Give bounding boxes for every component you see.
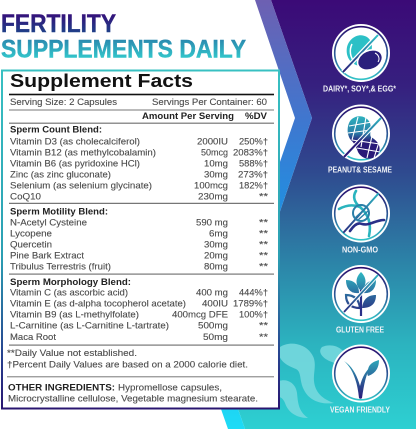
title line 2: SUPPLEMENTS DAILY [1, 36, 246, 64]
sperm morphology blend: Vitamin E (as d-alpha tocopherol acetate) [10, 299, 186, 309]
serving info: Serving Size: 2 Capsules [10, 97, 117, 107]
badge: vegan friendly [332, 344, 390, 402]
sperm count blend: 588%† [239, 159, 268, 169]
sperm motility blend: 30mg [204, 240, 228, 250]
sperm morphology blend: 50mg [203, 332, 228, 342]
sperm morphology blend: 444%† [239, 288, 268, 298]
sperm motility blend [10, 206, 268, 272]
footnotes [7, 348, 248, 370]
sperm count blend: Zinc (as zinc gluconate) [10, 170, 111, 180]
sperm motility blend: Pine Bark Extract [10, 250, 84, 260]
sperm morphology blend: 1789%† [233, 299, 268, 309]
sperm morphology blend: 400mcg DFE [172, 310, 228, 320]
badge: gluten free [332, 265, 390, 323]
sperm motility blend: Tribulus Terrestris (fruit) [10, 262, 111, 272]
sperm count blend: 50mcg [201, 148, 228, 158]
sperm count blend: 30mg [204, 170, 228, 180]
decorative sperm shapes [279, 344, 358, 418]
sperm morphology blend: 500mg [198, 321, 228, 331]
label: gluten free: GLUTEN FREE [336, 326, 385, 335]
sperm motility blend: Quercetin [10, 240, 52, 250]
title [1, 10, 246, 64]
sperm count blend: Vitamin B6 (as pyridoxine HCl) [10, 159, 140, 169]
icon: milk drop and bean [343, 35, 386, 74]
panel: supplement facts [2, 70, 279, 408]
sperm count blend: 100mcg [194, 181, 228, 191]
sperm count blend: 273%† [238, 170, 268, 180]
footnotes: **Daily Value not established. [7, 348, 137, 358]
sperm count blend: 250%† [239, 137, 268, 147]
sperm motility blend: 80mg [204, 262, 228, 272]
footnotes: †Percent Daily Values are based on a 2000 calorie diet. [7, 360, 248, 370]
sperm motility blend: Sperm Motility Blend: [10, 206, 108, 216]
icon: peanut [344, 116, 381, 159]
sperm morphology blend: L-Carnitine (as L-Carnitine L-tartrate) [10, 321, 169, 331]
sperm morphology blend: ** [259, 332, 268, 342]
sperm count blend: ** [259, 192, 268, 202]
sperm morphology blend: 400 mg [196, 288, 228, 298]
sperm count blend: 10mg [204, 159, 228, 169]
column headers: Amount Per Serving [142, 111, 234, 121]
sperm count blend [10, 125, 268, 202]
sperm motility blend: N-Acetyl Cysteine [10, 218, 87, 228]
other ingredients: OTHER INGREDIENTS: [8, 383, 115, 393]
label: non-GMO: NON-GMO [342, 246, 378, 255]
sperm morphology blend: Maca Root [10, 332, 56, 342]
sperm count blend: Sperm Count Blend: [10, 125, 102, 135]
sperm motility blend: ** [259, 240, 268, 250]
sperm count blend: 182%† [239, 181, 268, 191]
sperm morphology blend: Sperm Morphology Blend: [10, 277, 131, 287]
title line 1: FERTILITY [1, 10, 116, 38]
panel box [2, 70, 279, 408]
sperm motility blend: Lycopene [10, 228, 52, 238]
label: dairy soy egg: DAIRY*, SOY*,& EGG* [323, 85, 397, 94]
sperm count blend: 2083%† [233, 148, 268, 158]
badge: non-GMO [332, 184, 390, 242]
sperm morphology blend: Vitamin B9 (as L-methylfolate) [10, 310, 139, 320]
serving info [10, 97, 267, 107]
chevron band [208, 0, 312, 429]
sperm morphology blend: 100%† [239, 310, 268, 320]
badge: dairy soy egg free [332, 24, 390, 82]
sperm count blend: Vitamin B12 (as methylcobalamin) [10, 148, 156, 158]
other ingredients: Microcrystalline cellulose, Vegetable magnesium stearate. [8, 394, 258, 404]
sperm motility blend: ** [259, 218, 268, 228]
sperm count blend: Selenium (as selenium glycinate) [10, 181, 152, 191]
sperm motility blend: ** [259, 262, 268, 272]
badge: peanut and sesame free [332, 104, 390, 162]
sperm count blend: CoQ10 [10, 192, 41, 202]
sperm motility blend: 590 mg [196, 218, 228, 228]
sperm morphology blend: ** [259, 321, 268, 331]
sperm motility blend: 20mg [204, 250, 228, 260]
serving info: Servings Per Container: 60 [152, 97, 267, 107]
sperm count blend: Vitamin D3 (as cholecalciferol) [10, 137, 140, 147]
other ingredients: Hypromellose capsules, [118, 383, 222, 393]
sperm motility blend: ** [259, 228, 268, 238]
sperm motility blend: 6mg [209, 228, 228, 238]
sperm morphology blend [10, 277, 268, 342]
column headers: %DV [245, 111, 268, 121]
label: peanut and sesame: PEANUT& SESAME [328, 166, 393, 175]
other ingredients [8, 383, 258, 404]
icon: V leaf [344, 360, 379, 399]
sperm morphology blend: 400IU [202, 299, 228, 309]
sperm count blend: 2000IU [197, 137, 228, 147]
icon: DNA helix [339, 191, 384, 236]
sperm morphology blend: Vitamin C (as ascorbic acid) [10, 288, 128, 298]
icon: wheat [344, 272, 378, 316]
right gradient panel [225, 0, 416, 429]
heading: Supplement Facts [10, 71, 193, 91]
sperm motility blend: ** [259, 250, 268, 260]
sperm count blend: 230mg [198, 192, 228, 202]
label: vegan friendly: VEGAN FRIENDLY [330, 405, 391, 414]
